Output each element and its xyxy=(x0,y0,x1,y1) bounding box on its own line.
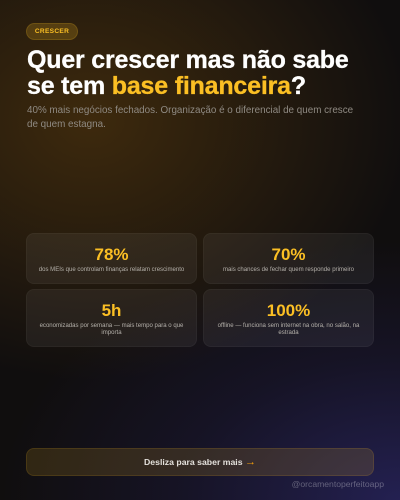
subtitle xyxy=(27,105,353,130)
handle: @orcamentoperfeitoapp: @orcamentoperfeitoapp xyxy=(292,479,384,489)
title: se tem base financeira? xyxy=(27,72,306,100)
stat card: 100% xyxy=(203,289,374,347)
stat label: dos MEIs que controlam finanças relatam crescimento xyxy=(39,266,184,272)
stat label: mais chances de fechar quem responde primeiro xyxy=(223,266,354,272)
stat card: 70% xyxy=(203,233,374,284)
title xyxy=(27,46,349,100)
stat label: offline — funciona sem internet na obra, no salão, na xyxy=(218,322,359,328)
stat value: 5h: 5h xyxy=(102,301,121,320)
call to action button: Desliza para saber mais → xyxy=(144,456,256,468)
title: Quer crescer mas não sabe xyxy=(27,46,349,74)
call to action button xyxy=(26,448,374,476)
stat label: estrada xyxy=(278,330,299,336)
stat label: importa xyxy=(101,330,122,336)
stat value: 70%: 70% xyxy=(271,245,306,264)
stat label: economizadas por semana — mais tempo para o que xyxy=(40,322,183,328)
stat value: 78%: 78% xyxy=(94,245,129,264)
subtitle: de quem estagna. xyxy=(27,118,106,130)
badge: CRESCER xyxy=(26,23,78,40)
stat card: 78% xyxy=(26,233,197,284)
stat label xyxy=(40,322,184,336)
stat label xyxy=(218,322,360,336)
stat value: 100%: 100% xyxy=(267,301,310,320)
subtitle: 40% mais negócios fechados. Organização é o diferencial de quem cresce xyxy=(27,105,353,116)
badge: CRESCER: CRESCER xyxy=(35,28,69,35)
stat card: 5h xyxy=(26,289,197,347)
